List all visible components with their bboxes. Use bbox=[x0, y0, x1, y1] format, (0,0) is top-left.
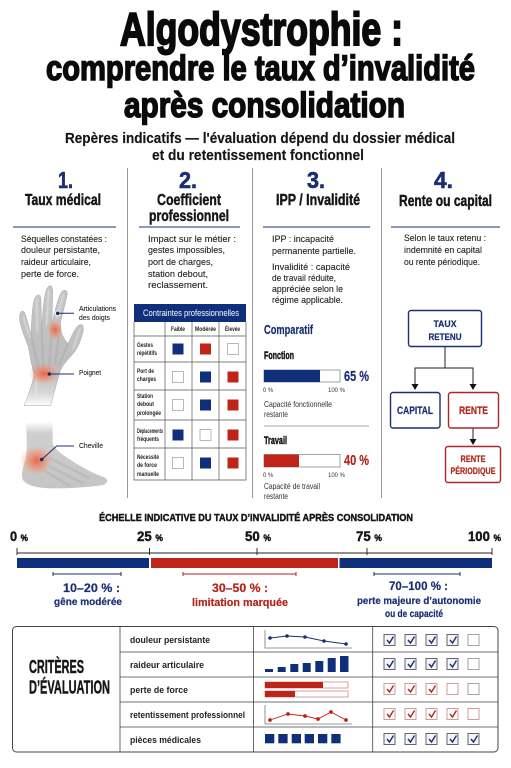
range 70–100 %: 70–100 % : bbox=[389, 579, 448, 593]
table: contraintes professionnelles: Déplacements bbox=[137, 428, 163, 435]
scale bar bbox=[17, 558, 492, 568]
step 3 heading: IPP / Invalidité bbox=[276, 192, 360, 209]
bars: perte de force bbox=[265, 682, 348, 697]
scale labels: 25 % bbox=[137, 528, 163, 544]
callouts: hand and foot labels: Cheville bbox=[79, 441, 103, 450]
bar: fonction 65 %: 100 % bbox=[328, 388, 346, 394]
panel: critères d'évaluation bbox=[12, 626, 498, 752]
step 1 text: perte de force. bbox=[21, 268, 79, 279]
scale labels: 100 % bbox=[468, 528, 501, 544]
range 70–100 % bbox=[357, 572, 481, 620]
subtitle: Repères indicatifs — l'évaluation dépend du dossier médical bbox=[65, 131, 455, 147]
step 3 text: régime applicable. bbox=[272, 294, 343, 305]
table: contraintes professionnelles: répétitifs bbox=[137, 350, 157, 357]
scale labels: 75 % bbox=[356, 528, 382, 544]
step 2 heading bbox=[139, 167, 240, 227]
table: contraintes professionnelles: Faible bbox=[171, 326, 185, 333]
panel: step 3 IPP / invalidité bbox=[263, 167, 370, 501]
subtitle: et du retentissement fonctionnel bbox=[152, 148, 364, 164]
table: contraintes professionnelles: Station bbox=[137, 393, 153, 400]
range 70–100 %: ou de capacité bbox=[385, 609, 443, 620]
box: rente périodique bbox=[446, 446, 500, 482]
step 3 text: IPP : incapacité bbox=[272, 233, 334, 244]
step 2 text: reclassement. bbox=[148, 279, 208, 290]
step 2 text: Impact sur le métier : bbox=[148, 233, 236, 244]
step 4 text bbox=[404, 232, 486, 267]
panel: step 4 rente ou capital bbox=[390, 167, 500, 482]
table: contraintes professionnelles: Port de bbox=[137, 368, 154, 375]
table: contraintes professionnelles: fréquents bbox=[137, 436, 159, 443]
step 4 heading: 4. bbox=[434, 167, 453, 193]
flowchart: taux retenu bbox=[390, 310, 500, 482]
table: contraintes professionnelles: de force bbox=[137, 462, 157, 469]
step 3 text: de travail réduite, bbox=[272, 272, 336, 283]
box: rente: RENTE bbox=[459, 405, 488, 417]
bar: travail 40 %: 100 % bbox=[328, 473, 346, 479]
step 1 text bbox=[21, 233, 107, 279]
box: rente périodique: PÉRIODIQUE bbox=[450, 466, 496, 476]
squares: pièces médicales bbox=[265, 734, 341, 743]
box: taux retenu bbox=[408, 310, 482, 346]
title bbox=[46, 3, 475, 125]
box: rente bbox=[448, 392, 498, 428]
step 2 text: gestes impossibles, bbox=[148, 244, 225, 255]
step 1 heading: Taux médical bbox=[25, 192, 101, 209]
step 3 text: appréciée selon le bbox=[272, 283, 343, 294]
table: contraintes professionnelles: manuelle bbox=[137, 471, 159, 478]
step 2 text bbox=[148, 233, 236, 290]
step 1 text: douleur persistante, bbox=[21, 244, 100, 255]
box: rente périodique: RENTE bbox=[460, 454, 486, 464]
subtitle bbox=[65, 131, 455, 164]
criteria labels: retentissement professionnel bbox=[130, 710, 245, 721]
table: contraintes professionnelles: Contraintes professionnelles bbox=[143, 308, 239, 319]
criteria labels: raideur articulaire bbox=[130, 660, 204, 671]
range 10–20 % bbox=[53, 572, 122, 608]
scale labels: 0 % bbox=[10, 528, 28, 544]
bar: fonction 65 %: 0 % bbox=[263, 388, 274, 394]
title: après consolidation bbox=[124, 86, 405, 125]
sparkline: retentissement bbox=[265, 705, 352, 724]
table: contraintes professionnelles: Élevée bbox=[225, 324, 240, 333]
icon: foot and ankle with pain zone bbox=[20, 422, 107, 488]
bar: fonction 65 %: 65 % bbox=[344, 368, 369, 385]
range 30–50 %: 30–50 % : bbox=[212, 581, 268, 595]
box: taux retenu: RETENU bbox=[428, 332, 462, 343]
bar: fonction 65 %: Capacité fonctionnelle bbox=[264, 400, 332, 409]
table: contraintes professionnelles: debout bbox=[137, 401, 155, 408]
step 3 text: Invalidité : capacité bbox=[272, 261, 350, 272]
step 3 heading: 3. bbox=[307, 167, 325, 193]
step 2 heading: Coefficient bbox=[157, 192, 222, 209]
table: contraintes professionnelles: Modérée bbox=[195, 326, 216, 333]
step 4 heading bbox=[391, 167, 500, 227]
table: contraintes professionnelles: Nécessité bbox=[137, 454, 159, 461]
step 1 text: Séquelles constatées : bbox=[21, 233, 107, 244]
bar: travail 40 %: 0 % bbox=[263, 473, 274, 479]
step 4 text: ou rente périodique. bbox=[404, 256, 480, 267]
range 10–20 %: 10–20 % : bbox=[63, 581, 120, 595]
box: capital bbox=[390, 392, 440, 428]
box: capital: CAPITAL bbox=[397, 405, 433, 417]
bar: travail 40 %: Travail bbox=[264, 435, 287, 447]
arrows bbox=[412, 347, 476, 445]
step 3 heading bbox=[263, 167, 370, 227]
sparkline: douleur bbox=[265, 630, 352, 648]
bar: travail 40 %: 40 % bbox=[344, 452, 369, 469]
chart: comparatif bbox=[263, 323, 369, 501]
range 30–50 % bbox=[183, 572, 296, 609]
criteria heading: CRITÈRES bbox=[29, 656, 84, 677]
bar: travail 40 %: restante bbox=[264, 492, 288, 501]
step 2 text: station debout, bbox=[148, 268, 208, 279]
scale title: ÉCHELLE INDICATIVE DU TAUX D’INVALIDITÉ APRÈS CONSOLIDATION bbox=[99, 511, 413, 524]
chart: comparatif: Comparatif bbox=[264, 323, 314, 337]
table: contraintes professionnelles: charges bbox=[137, 376, 156, 383]
panel: step 1 taux médical bbox=[13, 167, 116, 488]
criteria heading: D’ÉVALUATION bbox=[29, 676, 110, 698]
step 3 text bbox=[272, 233, 356, 305]
bar: travail 40 %: Capacité de travail bbox=[264, 482, 320, 491]
step 2 text: port de charges, bbox=[148, 256, 213, 267]
bar: fonction 65 %: Fonction bbox=[264, 350, 294, 362]
step 1 heading bbox=[13, 167, 116, 227]
step 2 heading: 2. bbox=[179, 167, 197, 193]
panel: indicative scale bbox=[10, 511, 501, 620]
table: contraintes professionnelles bbox=[134, 304, 246, 480]
panel: step 2 coefficient professionnel bbox=[134, 167, 246, 480]
callouts: hand and foot labels: Articulations bbox=[79, 304, 116, 313]
criteria labels: douleur persistante bbox=[130, 635, 210, 646]
criteria labels: pièces médicales bbox=[130, 735, 201, 746]
criteria labels: perte de force bbox=[130, 685, 188, 696]
table: contraintes professionnelles: Gestes bbox=[137, 342, 153, 349]
bar: fonction 65 % bbox=[263, 350, 369, 419]
step 4 text: indemnité en capital bbox=[404, 244, 482, 255]
range 70–100 %: perte majeure d’autonomie bbox=[357, 596, 481, 607]
title: Algodystrophie : bbox=[120, 3, 403, 55]
step 2 heading: professionnel bbox=[149, 208, 229, 225]
bar: fonction 65 %: restante bbox=[264, 410, 288, 419]
callouts: hand and foot labels: Poignet bbox=[79, 368, 102, 377]
step 4 text: Selon le taux retenu : bbox=[404, 232, 486, 243]
checkboxes bbox=[384, 634, 479, 744]
bars: raideur bbox=[265, 656, 348, 672]
scale labels: 50 % bbox=[245, 528, 271, 544]
icon: hand with pain zones bbox=[20, 286, 83, 406]
callouts: hand and foot labels bbox=[40, 304, 116, 461]
step 1 text: raideur articulaire, bbox=[21, 256, 91, 267]
step 3 text: permanente partielle. bbox=[272, 245, 356, 256]
bar: travail 40 % bbox=[263, 435, 369, 501]
range 10–20 %: gêne modérée bbox=[54, 596, 122, 608]
box: taux retenu: TAUX bbox=[434, 319, 457, 330]
step 1 heading: 1. bbox=[58, 167, 73, 193]
scale labels bbox=[10, 528, 501, 544]
table: contraintes professionnelles: prolongée bbox=[137, 410, 161, 417]
range 30–50 %: limitation marquée bbox=[192, 597, 288, 609]
criteria labels bbox=[130, 635, 245, 746]
criteria heading bbox=[29, 656, 110, 698]
callouts: hand and foot labels: des doigts bbox=[79, 313, 110, 322]
